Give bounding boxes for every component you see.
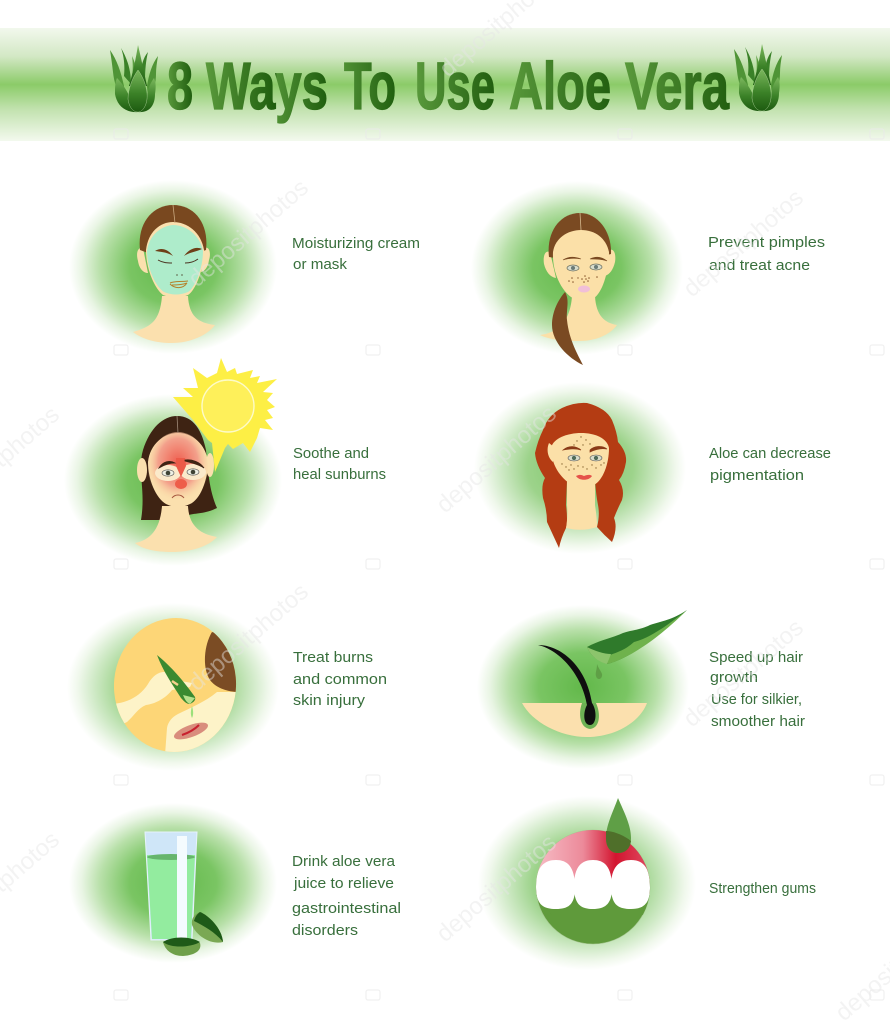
- text: hair: Use for silkier,: [711, 692, 802, 708]
- illustration: red-haired woman with freckles: [535, 403, 626, 548]
- illustration: aloe pieces: [163, 912, 223, 956]
- text: pigmentation: Aloe can decrease: [709, 446, 831, 462]
- text: hair: growth: [710, 670, 758, 686]
- panel: gums: [478, 796, 696, 970]
- panel: burns: [67, 603, 279, 771]
- panel: pimples and acne: [471, 181, 683, 365]
- text: burns: and common: [293, 672, 387, 688]
- icon: aloe drop: [606, 798, 631, 853]
- text: juice: juice to relieve: [293, 876, 394, 892]
- title: Aloe: [509, 49, 611, 124]
- illustration: sunburned woman: [135, 416, 217, 552]
- icon: sun: [173, 358, 277, 472]
- title: Ways: [206, 49, 328, 124]
- text: moisturizing: [292, 236, 420, 273]
- text: sunburns: [293, 446, 386, 483]
- text: pigmentation: [709, 446, 831, 484]
- watermark text: depositphotos: [431, 829, 562, 948]
- icon: right aloe plant: [734, 44, 782, 111]
- text: burns: [293, 650, 387, 709]
- panel: hair growth: [477, 605, 689, 769]
- watermark text: depositphotos: [431, 400, 562, 519]
- title: Vera: [625, 49, 730, 124]
- text: juice: gastrointestinal: [292, 901, 401, 917]
- text: hair: [709, 650, 805, 730]
- icon: left aloe plant: [110, 45, 158, 112]
- watermark text: depositphotos: [183, 578, 314, 697]
- text: juice: [292, 854, 401, 939]
- text: moisturizing: or mask: [293, 257, 348, 273]
- panel: juice: [69, 803, 277, 963]
- panel: sunburns: [64, 358, 282, 566]
- header band: [0, 28, 890, 141]
- watermark text: depositphotos: [678, 184, 809, 303]
- text: juice: disorders: [292, 923, 358, 939]
- text: pimples: [708, 235, 825, 274]
- text: pimples: Prevent pimples: [708, 235, 825, 251]
- panel: moisturizing mask: [69, 180, 277, 354]
- text: juice: Drink aloe vera: [292, 854, 396, 870]
- text: pigmentation: pigmentation: [710, 468, 804, 484]
- text: pimples: and treat acne: [709, 258, 810, 274]
- watermark text: depositphotos: [678, 614, 809, 733]
- text: burns: skin injury: [293, 693, 366, 709]
- text: burns: Treat burns: [293, 650, 373, 666]
- text: sunburns: Soothe and: [293, 446, 369, 462]
- title: Use: [415, 49, 495, 124]
- illustration: skin and hair follicle: [522, 645, 647, 737]
- text: hair: Speed up hair: [709, 650, 803, 666]
- text: hair: smoother hair: [711, 714, 805, 730]
- watermark text: depositphotos: [183, 174, 314, 293]
- illustration: aloe leaf: [587, 610, 687, 679]
- illustration: woman with acne: [540, 213, 617, 365]
- title: [167, 49, 730, 124]
- illustration: aloe applied on burn: [114, 618, 236, 752]
- title: To: [344, 49, 396, 124]
- illustration: glass of aloe juice: [145, 832, 197, 940]
- panel: pigmentation: [474, 382, 686, 554]
- text: sunburns: heal sunburns: [293, 467, 386, 483]
- illustration: woman with face mask: [133, 205, 215, 343]
- text: moisturizing: Moisturizing cream: [292, 236, 420, 252]
- text: gums: Strengthen gums: [709, 881, 816, 897]
- illustration: teeth and gums: [530, 798, 656, 944]
- title: 8: [167, 49, 193, 124]
